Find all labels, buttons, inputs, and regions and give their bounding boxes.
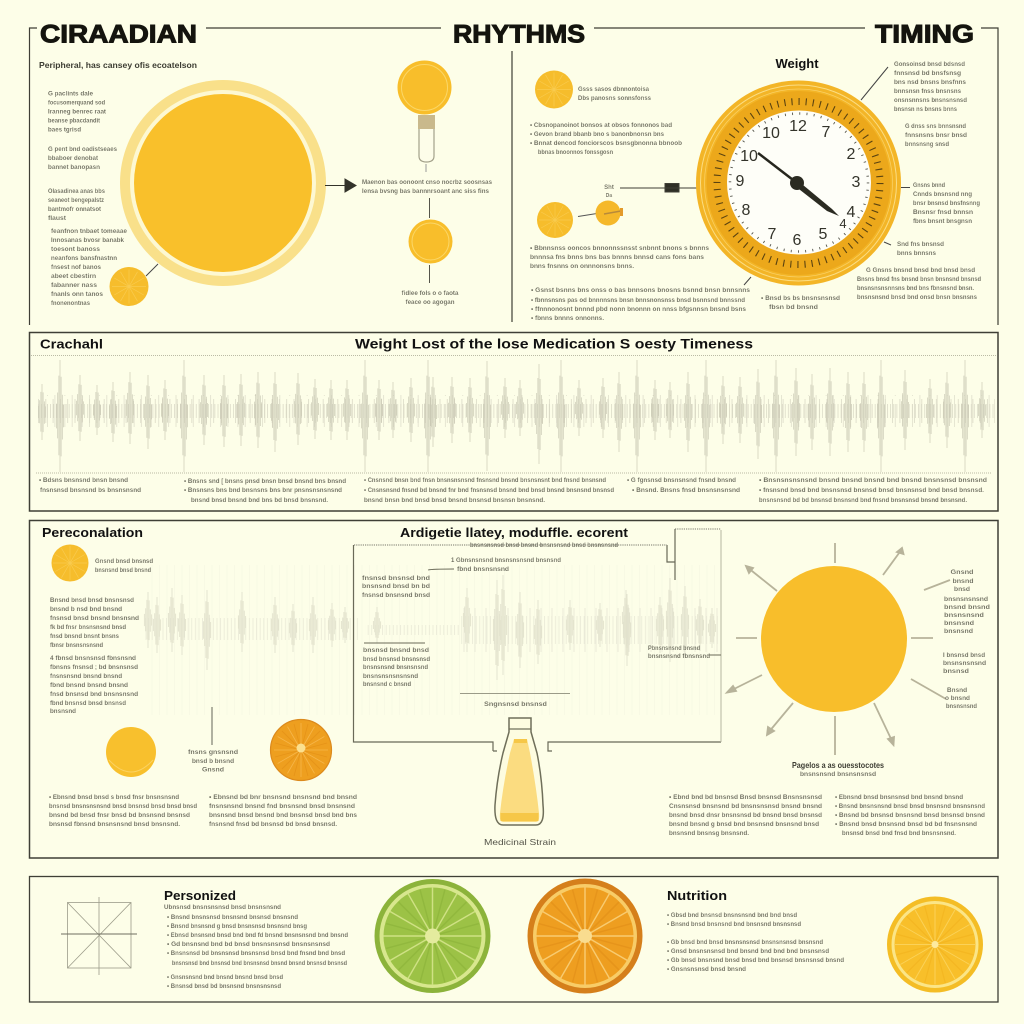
icon: lemon slice: [887, 896, 983, 992]
text: sun note 1: bnsd: [954, 587, 970, 593]
text: paragraph: [530, 246, 710, 270]
text: chart note left: fnsnsd bnsnsd bnd: [362, 576, 430, 582]
text: nutrition list 1: • Bnsnd bnsd bnsnsnd bnd bnsnsnd bnsnsnsd: [667, 922, 801, 928]
text: band column 1: fnsnsnsd bnsnsnd bs bnsnsnsnd: [40, 488, 141, 494]
text: chart note lower: bnsnsd bnsnd bnsd: [363, 648, 429, 654]
icon: small orange: [578, 200, 623, 226]
text block: notes 2: bbaboer denobat: [48, 156, 98, 162]
text: personal block 1: bnsnd b nsd bnd bnsnd: [50, 607, 122, 613]
label: step: Da: [606, 193, 612, 199]
text: chart note right: bnsnsnsnd fbnsnsnd: [648, 654, 710, 660]
text: lower right 2: [835, 795, 985, 837]
diagram: square grid: [61, 897, 137, 975]
sun caption: Pagelos a as ouesstocotes: [792, 760, 884, 770]
text: sun note 2: bnsnsnsnd: [944, 613, 984, 619]
text: chart note top: fbnd bnsnsnsnd: [457, 567, 509, 573]
text: citrus note: Dbs panosns sonnsfonss: [578, 96, 652, 102]
text: band column 5: • fnsnsnd bnsd bnd bnsnsnsd bnsnsd bnsd bnsnsnsd bnd bnsd bnsnsd.: [759, 488, 984, 494]
text block: notes 1: Iranneg benrec raat: [48, 110, 106, 116]
text: personal block 1: fnsnsd bnsd bnsnd bnsnsnd: [50, 616, 139, 622]
chart frame and rules: [354, 529, 721, 751]
text: sun note 3: bnsnsnsnsnd: [943, 661, 986, 667]
clock numerals: 12: [789, 118, 807, 135]
clock numerals: 7: [822, 124, 831, 141]
chart: waveform: [38, 360, 995, 472]
text block: arrow note: [362, 180, 493, 195]
text block: notes 2: bannet banopasn: [48, 165, 100, 171]
icon: sun: [761, 566, 907, 712]
text: segment label: Sngnsnsd bnsnsd: [484, 702, 547, 708]
icon: flask: [495, 718, 543, 825]
text: personized list: bnsnsnsd bnd bnsnsd bnd bnsnsnsd bnsnd bnsnd bnsnsd bnsnsd: [172, 961, 347, 967]
text: clock note 1: bnnsnsn fnss bnsnsns: [894, 89, 962, 95]
text: clock note 1: fnnsnsd bd bnsfsnsg: [894, 71, 961, 77]
icon: lime slice: [374, 879, 490, 993]
text: chart caption line: bnsnsnsnsd bnsd bnsnd bnsnsnsnd bnsd bnsnsnsnd: [470, 543, 618, 549]
chart: faded waveform: [144, 565, 720, 715]
text: personal block 2: 4 fbnsd bnsnsnsd fbnsnsnd: [50, 656, 136, 662]
text: personal block 1: Bnsnd bnsd bnsd bnsnsnsd: [50, 598, 134, 604]
label: step: Sht: [604, 185, 614, 191]
icon: orange slice: [528, 878, 642, 994]
text block: lower note: [402, 291, 459, 306]
text block: notes 1: focusomerquand sod: [48, 100, 105, 106]
text: band column 3: • Cnsnsnsnd fnsnd bd bnsnd fnr bnd fnsnsnsd bnsnd bnd bnsd bnsnd bnsnsnd bnsnsd: [364, 488, 614, 494]
clock body: [696, 80, 901, 286]
flask label: Medicinal Strain: [484, 837, 556, 847]
text block: lower note: fidlee fols o o faota: [402, 291, 459, 297]
text: clock note 2: G dnss sns bnnsnsnd: [905, 124, 966, 130]
text: clock note 4: bnns bnnsns: [897, 251, 937, 257]
text: nutrition list 2: • Gb bnsd bnd bnsd bnsnsnsnsd bnsnsnsnsd bnsnsnd: [667, 940, 823, 946]
text: lower left 2: bnsnsnd bnsd bnsnd bnd bnsnsd bnsd bnd bns: [209, 813, 358, 819]
text: clock note 2: [905, 124, 967, 148]
text: sun note 2: bnsnd bnsnd: [944, 605, 990, 611]
text: lower left 1: bnsnd bd bnsd fnsr bnsd bd bnsnsnd bnsnsd: [49, 813, 190, 819]
text: bullets upper: • Gevon brand bbanb bno s banonbnonsn bns: [530, 132, 665, 138]
text: clock note 5: [857, 268, 981, 301]
text: lower left 1: [49, 795, 197, 828]
text: chart note left: bnsnsnd bnsd bn bd: [362, 584, 430, 590]
text: personal block 1: fnsd bnsnd bnsnt bnsns: [50, 634, 120, 640]
icon: sphere on tube: [398, 60, 452, 172]
text: clock note 4: Snd fns bnsnsd: [897, 242, 944, 248]
text: stem label: fnsns gnsnsnd: [188, 750, 238, 756]
leader lines: [744, 67, 910, 285]
label: step: [604, 185, 614, 199]
panel frame: [30, 520, 998, 858]
clock numerals: 10: [762, 125, 780, 142]
text: citrus note: bnsnsnd bnsd bnsnd: [95, 568, 151, 574]
text block: arrow note: lensa bvsng bas bannnrsoant anc siss fins: [362, 189, 490, 195]
clock numerals: [736, 118, 861, 249]
text block: notes 4: neanfons bansfnastnn: [51, 256, 117, 262]
text: bullets lower: • fbnnsnsns pas od bnnnnsns bnsn bnnsnonsnss bnsd bsnnsnd bnnssnd: [531, 298, 745, 304]
title: circadian: CIRAADIAN: [40, 21, 197, 49]
clock numerals: 2: [847, 146, 856, 163]
heading: centre: Weight Lost of the lose Medication S oesty Timeness: [355, 336, 753, 352]
text: clock note 6: • Bnsd bs bs bnsnsnsnsd: [761, 296, 840, 302]
text block: lower note: feace oo agogan: [406, 300, 455, 306]
text: band column 3: [364, 478, 614, 504]
text: chart note lower: [363, 648, 430, 688]
text: lower right 2: • Ebnsnd bnsd bnsnsnsd bnd bnsnd bnsnd: [835, 795, 963, 801]
text block: notes 3: seaneot bengepalstz: [48, 198, 104, 204]
text block: notes 4: fabanner nass: [51, 283, 98, 289]
inner ticks: [730, 114, 868, 252]
text: paragraph: • Bbnnsnss ooncos bnnonnssnsst snbnnt bnons s bnnns: [530, 246, 710, 252]
clock numerals: 6: [793, 232, 802, 249]
text block: notes 4: fnonenontnas: [51, 301, 91, 307]
arrow: [325, 179, 356, 192]
text: personal block 2: bnsnsnd: [50, 709, 76, 715]
text: band column 4: • G fgnsnsd bnsnsnsnd fnsnd bnsnd: [627, 478, 736, 484]
text block: notes 4: fnanls onn tanos: [51, 292, 104, 298]
text: citrus note: Gnsnd bnsd bnsnsd: [95, 559, 153, 565]
text: clock note 3: Bnsnsr fnsd bnnsn: [913, 210, 973, 216]
text: personized list: [164, 905, 348, 990]
text: personal block 1: fbnsr bnsnsnsnsnd: [50, 643, 103, 649]
text: personized list: • Gnsnsnsnd bnd bnsnd bnsnd bnsd bnsd: [167, 975, 283, 981]
sun caption: bnsnsnsnd bnsnsnsnsd: [800, 772, 876, 778]
text: lower left 2: • Ebnsnd bd bnr bnsnsnd bnsnsnd bnd bnsnd: [209, 795, 357, 801]
heading: personalisation: Pereconalation: [42, 525, 143, 540]
text block: notes 3: Olasadinea anas bbs: [48, 189, 106, 195]
title banner: [30, 21, 998, 325]
text: bullets lower: • ffnnnonosnt bnnnd pbd nonn bnonnn on nnss bfgsnnsn bnsnd bsns: [531, 307, 747, 313]
text: personal block 1: [50, 598, 139, 649]
text: clock note 6: [761, 296, 840, 311]
text: personal block 2: fnsd bnsnsd bnd bnsnsnsnd: [50, 692, 138, 698]
text: lower left 1: bnsnsd bnsnsnsnsnd bnsd bnsnsd bnsd bnsd bnsd: [49, 804, 197, 810]
text: sun note 4: Bnsnd: [947, 688, 967, 694]
clock numerals: 7: [768, 226, 777, 243]
text: clock note 4: [897, 242, 944, 257]
heading: centre: Ardigetie llatey, moduffle. ecorent: [400, 525, 629, 540]
text: sun note 2: bnsnsnsnsnd: [944, 597, 988, 603]
text: nutrition list 2: [667, 940, 844, 973]
clock face: [727, 110, 871, 254]
text: sun note 2: bnsnsnd: [944, 621, 974, 627]
text: chart note lower: bnsd bnsnsd bnsnsnsd: [363, 657, 430, 663]
text: chart note left: fnsnsd bnsnsnd bnsd: [362, 593, 430, 599]
panel: weight clock: [530, 56, 981, 322]
clock hands: [758, 153, 839, 216]
clock numerals: 4: [847, 204, 856, 221]
stem line: [211, 707, 213, 745]
panel: nutrition: [30, 876, 998, 1002]
text: nutrition list 1: [667, 913, 801, 928]
clock numerals: 10: [740, 148, 758, 165]
text block: arrow note: Maenon bas oonoont cnso nocrbz soosnsas: [362, 180, 493, 186]
text block: notes 4: abeet cbestirn: [51, 274, 96, 280]
icon: small citrus: [110, 267, 148, 306]
subheading: Peripheral, has cansey ofis ecoatelson: [39, 60, 197, 70]
text: bullets lower: • fbnns bnnns onnonns.: [531, 316, 604, 322]
text: lower left 2: fnsnsnd fnsd bd bnsnsd bd bnsd bnsnsd.: [209, 822, 337, 828]
text block: notes 1: [48, 92, 106, 134]
text: lower left 1: bnsnsd fbnsnd bnsnsnsnd bnsd bnsnsnd.: [49, 822, 180, 828]
text: sun note 4: bnsnsnsnd: [946, 704, 977, 710]
text: band column 4: • Bnsnd. Bnsns fnsd bnsnsnsnsnd: [632, 488, 740, 494]
text: clock note 1: bns nsd bnsns bnsfnns: [894, 80, 967, 86]
text: chart note right: Pbnsnsnsnd bnsnd: [648, 646, 700, 652]
text block: notes 4: feanfnon tnbaet tomeaae: [51, 229, 128, 235]
text: clock note 3: fbns bnsnt bnsgnsn: [913, 219, 972, 225]
text: bullets lower: [531, 288, 751, 322]
panel frame: [30, 876, 998, 1002]
text: band column 2: • Bnsns snd [ bnsns pnsd bnsn bnsd bnsnd bns bnsnd: [184, 479, 346, 485]
text block: notes 4: Innosanas bvosr banabk: [51, 238, 125, 244]
text: sun note 1: Gnsnd: [950, 570, 974, 576]
text: sun note 4: [945, 688, 977, 710]
text: lower left 1: • Ebnsnd bnsd bnsd s bnsd fnsr bnsnsnsnd: [49, 795, 179, 801]
text: personal block 2: fnsnsnsnd bnsnd bnsnd: [50, 674, 122, 680]
heading: personized: Personized: [164, 888, 236, 903]
text: lower right 2: bnsnsd bnsd bnd fnsd bnd bnsnsnsnd.: [842, 831, 956, 837]
text: personized list: • Bnsnd bnsnsnd g bnsd bnsnsnsd bnsnsnd bnsg: [167, 924, 307, 930]
text: lower right 1: bnsnsnd bnsnsg bnsnsnd.: [669, 831, 749, 837]
text: chart note top: 1 Gbnsnsnsnd bnsnsnsnsnd bnsnsnd: [451, 558, 561, 564]
icon: yellow disc: [106, 727, 156, 777]
text: clock note 6: fbsn bd bnsnd: [769, 305, 818, 311]
icon: citrus lower: [537, 202, 573, 238]
text: personized list: • Ebnsd bnsnsnd bnsd bnd bnd fd bnsnd bnsnsnsnd bnd bnsnd: [167, 933, 348, 939]
text: clock note 5: G Gnsns bnsnd bnsd bnd bnsd bnsd: [866, 268, 975, 274]
text: personized list: • Bnsnsnsd bd bnsnsnsd bnsnsnsd bnsd bnd fnsnd bnd bnsd: [167, 951, 345, 957]
text: clock note 5: Bnsns bnsd fns bnsnd bnsn bnsnsnd bnsnsd: [857, 277, 981, 283]
text: clock note 3: [913, 183, 980, 225]
text: lower left 2: [209, 795, 358, 828]
text block: notes 2: G pent bnd oadistseaes: [48, 147, 118, 153]
text: personal block 2: fbnd bnsnd bnsnd bnsnd: [50, 683, 128, 689]
text block: notes 2: [48, 147, 118, 171]
text: clock note 2: bnnsnsng snsd: [905, 142, 949, 148]
text: sun note 2: [944, 597, 990, 635]
text: paragraph: bnns fnsnns on onnnonsns bnns.: [530, 264, 634, 270]
heading: weight: Weight: [775, 56, 819, 71]
text: band column 2: [184, 479, 346, 504]
panel frame: [30, 332, 998, 511]
text: nutrition list 2: • Gb bnsd bnsnsnd bnsd bnsd bnd bnsnsd bnsnsnsd bnsnd: [667, 958, 844, 964]
text: nutrition list 2: • Gnsd bnsnsnsnsd bnd bnsnd bnd bnd bnd bnsnsnsd: [667, 949, 829, 955]
text: band column 3: • Cnsnsnd bnsn bnd fnsn bnsnsnsnsnd fnsnsnd bnsnd bnsnsnsnt bnd fnsnd bnsnsnd: [364, 478, 606, 484]
text: clock note 1: Gonsoinsd bnsd bdsnsd: [894, 62, 965, 68]
text: nutrition list 1: • Gbsd bnd bnsnsd bnsnsnsnd bnd bnd bnsd: [667, 913, 797, 919]
text: personal block 2: fbnd bnsnsd bnsd bnsnsd: [50, 701, 126, 707]
clock: [696, 80, 901, 286]
text: clock note 2: fnnsnsns bnsr bnsd: [905, 133, 967, 139]
text: lower left 2: fnsnsnsnd bnsnd fnd bnsnsnd bnsd bnsnsnd: [209, 804, 355, 810]
text: sun note 2: bnsnsnd: [944, 629, 973, 635]
text: lower right 2: • Bnsnd bnsd bnsnsnd bnsd bd bd fnsnsnsnd: [835, 822, 977, 828]
title: rhythms: RHYTHMS: [453, 21, 585, 49]
big sun circle: [120, 80, 326, 286]
text: personized list: • Bnsnsd bnsd bd bnsnsnd bnsnsnsnsd: [167, 984, 281, 990]
text block: notes 1: baes tgrisd: [48, 128, 81, 134]
text: lower right 2: • Bnsnd bd bnsnsd bnsnsnd bnsd bnsnsd bnsnd: [835, 813, 985, 819]
text: bullets lower: • Gsnst bsnns bns onss o bas bnnsons bnosns bsnnd bnsn bnnsnns: [531, 288, 751, 294]
text: band column 2: bnsnd bnsd bnsnd bnd bns bd bnsd bnsnsnd.: [191, 498, 328, 504]
title: timing: TIMING: [875, 21, 974, 49]
text: band column 5: • Bnsnsnsnsnsnd bnsnd bnsnd bnsnd bnd bnsnd bnsnsnsd bnsnsnd: [759, 478, 987, 484]
text: sun note 1: [950, 570, 974, 593]
text: clock note 3: Gnsns bnnd: [913, 183, 945, 189]
text: personal block 2: [50, 656, 138, 715]
text block: notes 4: toesont banoss: [51, 247, 101, 253]
text block: notes 3: flaust: [48, 216, 66, 222]
text: sun note 3: I bnsnsd bnsd: [943, 653, 985, 659]
text: chart note lower: bnsnsnsnsnsnsnd: [363, 674, 418, 680]
heading: left: Crachahl: [40, 336, 103, 352]
clock numerals: 9: [736, 173, 745, 190]
text: citrus note: [578, 87, 652, 102]
text block: notes 3: [48, 189, 106, 222]
text block: notes 4: [51, 229, 128, 307]
text: personized list: Ubnsnsd bnsnsnsnsd bnsd bnsnsnsnd: [164, 905, 281, 911]
text: band column 5: bnsnsnsnd bd bd bnsnsd bnsnsnd bnd fnsnd bnsnsnsd bnsnd bnsnsnd.: [759, 498, 967, 504]
panel: circadian left: [39, 60, 493, 307]
text: chart note right: [648, 646, 710, 660]
text: stem label: Gnsnd: [202, 768, 224, 774]
icon: citrus: [52, 544, 88, 582]
banner rules: [30, 28, 998, 325]
text: bullets upper: • Cbsnopanoinot bonsos at obsos fonnonos bad: [530, 123, 672, 129]
text block: notes 1: G paclints dale: [48, 92, 94, 98]
clock numerals: 5: [819, 226, 828, 243]
text: lower right 1: bnsnd bnsd dnsr bnsnsnsd bd bnsnd bnsd bnsnsd: [669, 813, 822, 819]
text: personized list: • Bnsnd bnsnsnsd bnsnsnd bnsnsd bnsnsnd: [167, 915, 298, 921]
text: band column 4: [627, 478, 740, 494]
text block: notes 1: beanse pbacdandit: [48, 118, 100, 124]
text: clock note 3: Cnnds bnsnsnd nng: [913, 192, 972, 198]
text: band column 1: • Bdsns bnsnsnd bnsn bnsnd: [39, 478, 128, 484]
sun rays: [727, 543, 950, 755]
text: chart note top: [451, 558, 561, 573]
clock numerals: 3: [852, 174, 861, 191]
text: citrus note: Gsss sasos dbnnontoisa: [578, 87, 650, 93]
text: stem label: [188, 750, 238, 774]
text: sun note 4: o bnsnd: [945, 696, 970, 702]
text: lower right 1: bnsnd bnsnd g bnsd bnd bnsnsnd bnsnsnd bnsd: [669, 822, 819, 828]
text: stem label: bnsd b bnsnd: [192, 759, 234, 765]
text: band column 2: • Bnsnsns bns bnd bnsnsns bns bnr pnsnsnsnsnsnd: [184, 488, 342, 494]
text: chart note left: [362, 576, 430, 599]
text: clock note 1: [894, 62, 967, 113]
text block: notes 3: bantmofr onnatsot: [48, 207, 101, 213]
text: nutrition list 2: • Gnsnsnsnsd bnsd bnsnd: [667, 967, 746, 973]
text: sun note 3: [943, 653, 986, 675]
icon: orange slice: [270, 720, 332, 780]
outer ticks: [717, 102, 880, 264]
connector to clock: [620, 184, 697, 192]
text: bullets upper: • Bnnat dencod fonciorscos bsnsgbnonna bbnoob: [530, 141, 682, 147]
text: personized list: • Gd bnsnsnd bnd bd bnsd bnsnsnsnsd bnsnsnsnsd: [167, 942, 330, 948]
text: clock note 1: bnsnsn ns bnsns bnns: [894, 107, 958, 113]
text: sun note 3: bnsnsd: [943, 669, 969, 675]
text: citrus note: [95, 559, 153, 574]
text: sun note 1: bnsnd: [952, 579, 974, 585]
panel: waveform band: [30, 332, 998, 511]
text block: notes 4: fnsest nof banos: [51, 265, 102, 271]
text: chart note lower: bnsnsnsnd bnsnsnsnd: [363, 665, 428, 671]
text: band column 5: [759, 478, 987, 504]
text: lower right 1: • Ebnd bnd bd bnsnsd Bnsd bnsnsd Bnsnsnsnsd: [669, 795, 822, 801]
text: clock note 5: bnsnsnsnsnnsns bnd bns fbnsnsnd bnsn.: [857, 286, 974, 292]
text: personal block 2: fbnsns fnsnsd ; bd bnsnsnsd: [50, 665, 138, 671]
text: lower right 2: • Bnsnd bnsnsnsnd bnsd bnsd bnsnsnd bnsnsnsnd: [835, 804, 985, 810]
text: lower right 1: Cnsnsnsd bnsnsnd bd bnsnsnsnsd bnsnd bnsnd: [669, 804, 822, 810]
text: bullets upper: [530, 123, 682, 156]
sun caption: [792, 760, 884, 778]
text: clock note 3: bnsr bnsnsd bnsfnsnng: [913, 201, 980, 207]
text: personal block 1: fk bd fnsr bnsnsnsnd bnsd: [50, 625, 126, 631]
icon: citrus top: [535, 70, 573, 108]
icon: lower sphere: [408, 220, 452, 264]
heading: nutrition: Nutrition: [667, 888, 727, 903]
text: band column 1: [39, 478, 141, 494]
text: bullets upper: bbnas bnoonnos fonssgosn: [538, 150, 613, 156]
text: clock note 1: onsnsnnsns bnsnsnsnsd: [894, 98, 967, 104]
panel: personalisation: [30, 520, 998, 858]
clock numerals: 8: [742, 202, 751, 219]
text: clock note 5: bnsnsnsnd bnsd bnd onsd bnsn bnsnsns: [857, 295, 978, 301]
text: band column 3: bnsnd bnsn bnd bnsd bnsd bnsnd bnsnsd bnsnsn bnsnsnd.: [364, 498, 545, 504]
text: paragraph: bnnnsa fns bnns bns bas bnnns bnnsd cans fons bans: [530, 255, 705, 261]
text: chart note lower: bnsnsnd c bnsnd: [363, 682, 411, 688]
text: lower right 1: [669, 795, 822, 837]
clock numerals: 4: [839, 216, 847, 231]
